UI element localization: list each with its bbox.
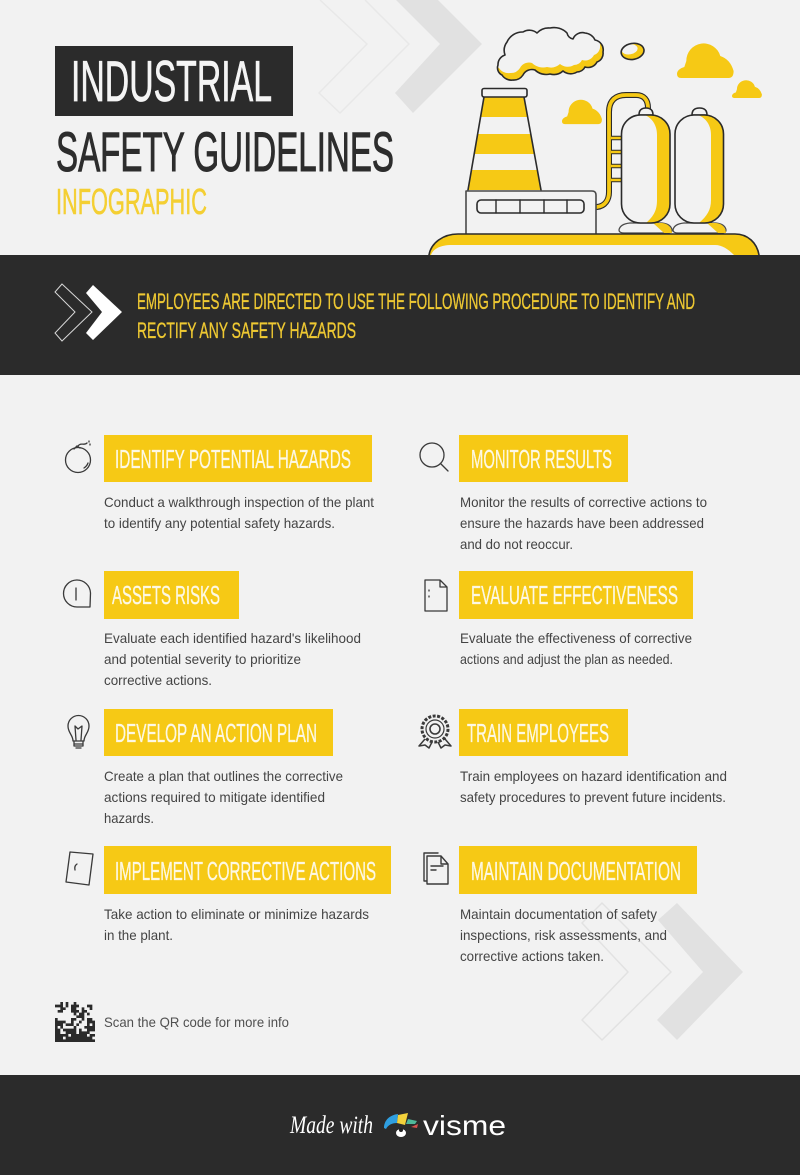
description: Take action to eliminate or minimize hazards (104, 906, 369, 922)
building (466, 191, 596, 234)
description: Evaluate the effectiveness of corrective (460, 630, 692, 646)
description: safety procedures to prevent future incidents. (460, 789, 726, 805)
background chevrons bottom (582, 903, 743, 1040)
description (460, 630, 692, 667)
yellow cloud small (732, 80, 762, 98)
description: in the plant. (104, 927, 173, 943)
yellow cloud middle (562, 100, 602, 124)
description (460, 494, 707, 552)
icon: bomb (66, 441, 90, 472)
heading (459, 435, 628, 482)
visme logo mark (384, 1113, 418, 1137)
heading: IDENTIFY POTENTIAL HAZARDS (115, 446, 351, 474)
icon: double chevron (55, 284, 122, 341)
made with: Made with (289, 1112, 373, 1139)
description: Create a plan that outlines the corrective (104, 768, 343, 784)
heading: TRAIN EMPLOYEES (467, 720, 609, 748)
intro band (0, 255, 800, 375)
title: infographic: INFOGRAPHIC (56, 181, 207, 222)
icon: stacked document (424, 853, 448, 884)
description (104, 906, 369, 943)
footer (0, 1075, 800, 1175)
description: corrective actions. (104, 672, 212, 688)
description: hazards. (104, 810, 154, 826)
description: Monitor the results of corrective actions to (460, 494, 707, 510)
description: and do not reoccur. (460, 536, 573, 552)
description: Maintain documentation of safety (460, 906, 657, 922)
heading (104, 571, 239, 619)
background chevrons top (319, 0, 482, 113)
description (104, 494, 374, 531)
step: develop an action plan (68, 709, 343, 826)
small smoke puff (620, 42, 645, 61)
pipe (597, 95, 648, 207)
description: corrective actions taken. (460, 948, 604, 964)
heading (104, 846, 391, 894)
description (460, 906, 667, 964)
icon: magnifier (420, 443, 448, 471)
description: actions and adjust the plan as needed. (460, 651, 673, 667)
description (104, 768, 343, 826)
qr code (55, 1002, 95, 1042)
description (104, 630, 361, 688)
description: ensure the hazards have been addressed (460, 515, 704, 531)
title: safety guidelines: SAFETY GUIDELINES (56, 120, 394, 183)
heading: DEVELOP AN ACTION PLAN (115, 720, 317, 748)
heading: IMPLEMENT CORRECTIVE ACTIONS (115, 858, 376, 886)
heading (459, 709, 628, 756)
heading (104, 709, 333, 756)
yellow cloud large (677, 43, 734, 78)
factory illustration (429, 21, 762, 255)
icon: tilted note (66, 852, 93, 885)
step: implement corrective actions (66, 846, 391, 943)
description: Conduct a walkthrough inspection of the plant (104, 494, 374, 510)
step: maintain documentation (424, 846, 697, 964)
smoke cloud (494, 21, 603, 80)
step: identify potential hazards (66, 435, 374, 531)
intro text: RECTIFY ANY SAFETY HAZARDS (137, 318, 356, 343)
description: actions required to mitigate identified (104, 789, 325, 805)
platform (429, 234, 759, 255)
title: industrial (55, 46, 293, 116)
tank left (619, 108, 672, 233)
description: Evaluate each identified hazard's likelihood (104, 630, 361, 646)
icon: document (425, 580, 447, 611)
chimney (468, 88, 541, 190)
description: and potential severity to prioritize (104, 651, 301, 667)
heading (459, 846, 697, 894)
step: evaluate effectiveness (425, 571, 693, 667)
heading (104, 435, 372, 482)
step: assets risks (64, 571, 361, 688)
tank right (673, 108, 726, 233)
title (55, 46, 394, 222)
step: train employees (419, 709, 727, 805)
qr caption: Scan the QR code for more info (104, 1014, 289, 1030)
heading: ASSETS RISKS (112, 582, 220, 610)
description: to identify any potential safety hazards. (104, 515, 335, 531)
icon: medal (419, 716, 451, 748)
description (460, 768, 727, 805)
heading (459, 571, 693, 619)
description: inspections, risk assessments, and (460, 927, 667, 943)
title: industrial: INDUSTRIAL (71, 50, 272, 114)
heading: MONITOR RESULTS (471, 446, 612, 474)
visme wordmark: visme (423, 1110, 506, 1141)
description: Train employees on hazard identification and (460, 768, 727, 784)
step: monitor results (420, 435, 707, 552)
intro text (137, 289, 695, 343)
icon: alert bubble (64, 580, 90, 607)
icon: light bulb (68, 716, 89, 748)
